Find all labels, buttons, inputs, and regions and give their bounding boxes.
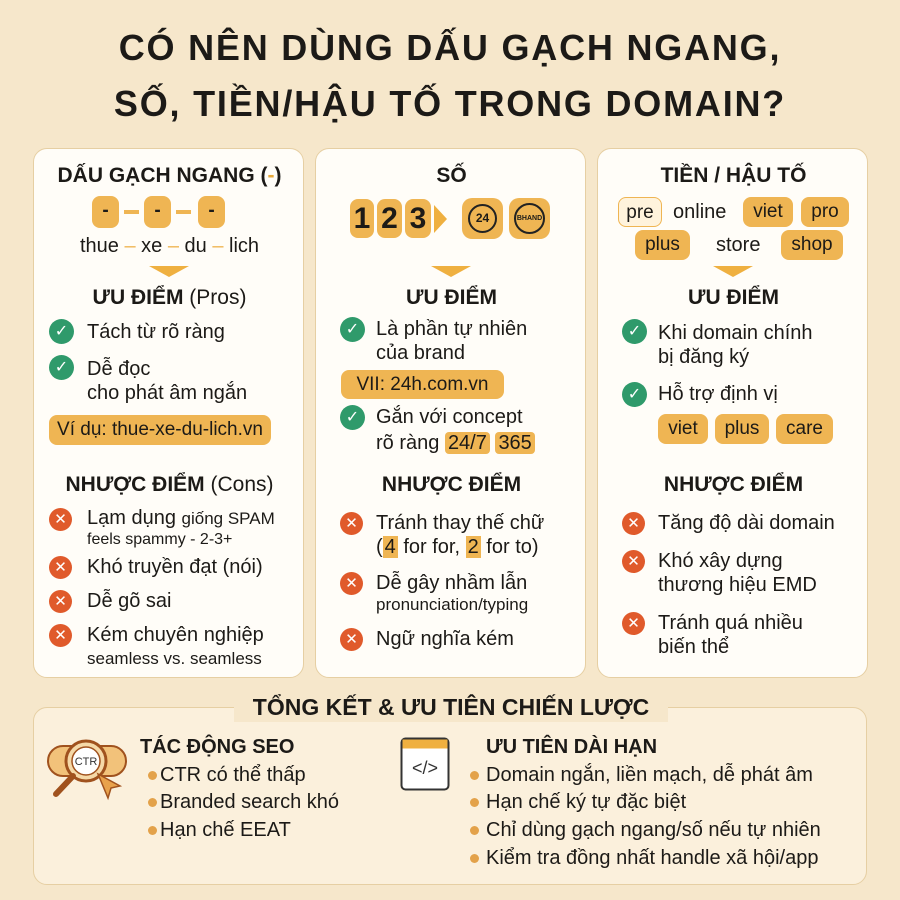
con 2: ✕	[627, 553, 640, 570]
pro 2: cho phát âm ngắn	[87, 382, 247, 404]
pro 1: bị đăng ký	[658, 346, 749, 368]
icon: 24h: 24	[476, 211, 489, 225]
SEO impact	[140, 734, 339, 841]
pro 1: ✓	[628, 323, 641, 340]
icon: CTR magnifier	[47, 740, 127, 800]
pro 2: Hỗ trợ định vị	[658, 383, 778, 405]
icon: CTR magnifier: CTR	[75, 756, 97, 768]
pro 1: của brand	[376, 342, 465, 364]
con 3	[49, 589, 172, 613]
SEO impact: Hạn chế EEAT	[160, 819, 291, 841]
pro 1	[49, 319, 225, 344]
affix tags: online	[673, 201, 726, 223]
con 2: Khó truyền đạt (nói)	[87, 556, 263, 578]
pros heading: ƯU ĐIỂM	[406, 286, 497, 309]
pro 1: Tách từ rõ ràng	[87, 321, 225, 343]
pro 1: Là phần tự nhiên	[376, 318, 527, 340]
summary heading: TỔNG KẾT & ƯU TIÊN CHIẾN LƯỢC	[253, 694, 649, 720]
cons heading: NHƯỢC ĐIỂM	[382, 473, 521, 496]
icon: globe: BHAND	[517, 215, 542, 222]
affix tags: shop	[791, 234, 833, 255]
long-term priorities	[470, 734, 821, 869]
icon: globe	[509, 198, 550, 239]
cons heading: NHƯỢC ĐIỂM (Cons)	[65, 473, 274, 496]
pro 1: ✓	[55, 323, 68, 340]
con 4: ✕	[54, 627, 67, 644]
long-term priorities: Chỉ dùng gạch ngang/số nếu tự nhiên	[486, 819, 821, 841]
pro 1: ✓	[346, 321, 359, 338]
con 1: Tăng độ dài domain	[658, 512, 835, 534]
pro 2: ✓	[346, 409, 359, 426]
affix tags: pre	[626, 202, 654, 223]
pro 2: plus	[725, 418, 759, 439]
number tiles: 1	[354, 202, 370, 235]
con 2: ✕	[345, 575, 358, 592]
con 1: Lạm dụng giống SPAM	[87, 507, 275, 529]
con 4: Kém chuyên nghiệp	[87, 624, 264, 646]
con 1	[340, 512, 544, 558]
hyphen pills: -	[102, 200, 109, 221]
pro 1: Khi domain chính	[658, 322, 813, 344]
con 1: ✕	[627, 515, 640, 532]
affix tags	[618, 197, 849, 260]
icon: code window	[400, 738, 450, 790]
pro 2: ✓	[55, 359, 68, 376]
SEO impact: CTR có thể thấp	[160, 764, 306, 786]
long-term priorities: ƯU TIÊN DÀI HẠN	[486, 736, 657, 758]
affix tags: viet	[753, 201, 783, 222]
hyphen pills: -	[208, 200, 215, 221]
example pill	[341, 370, 504, 399]
con 2: ✕	[54, 559, 67, 576]
con 4: seamless vs. seamless	[87, 649, 262, 668]
long-term priorities: Hạn chế ký tự đặc biệt	[486, 791, 686, 813]
pro 2: Dễ đọc	[87, 358, 150, 380]
long-term priorities: Kiểm tra đồng nhất handle xã hội/app	[486, 847, 818, 869]
con 3: biến thể	[658, 636, 729, 658]
heading: prefix/suffix: TIỀN / HẬU TỐ	[661, 164, 806, 187]
con 2: thương hiệu EMD	[658, 574, 817, 596]
con 2: Dễ gây nhầm lẫn	[376, 572, 527, 594]
affix tags: plus	[645, 234, 680, 255]
con 1	[49, 507, 275, 548]
pro 1	[622, 319, 813, 368]
con 2: Khó xây dựng	[658, 550, 783, 572]
con 4	[49, 624, 264, 668]
affix tags: pro	[811, 201, 839, 222]
affix tags: store	[716, 234, 760, 256]
con 1: ✕	[54, 511, 67, 528]
con 1: (4 for for, 2 for to)	[376, 536, 539, 558]
heading: numbers: SỐ	[436, 164, 467, 187]
example words: thue – xe – du – lich	[80, 235, 259, 257]
pro 2: rõ ràng 24/7 365	[376, 432, 532, 454]
con 3: ✕	[54, 593, 67, 610]
number tiles: 3	[410, 202, 426, 235]
arrow	[713, 266, 753, 277]
title: SỐ, TIỀN/HẬU TỐ TRONG DOMAIN?	[114, 83, 786, 124]
pro 1	[340, 317, 527, 364]
icon: 24h	[462, 198, 503, 239]
panel: summary	[33, 707, 867, 885]
panel: prefix/suffix	[597, 148, 868, 678]
con 1: feels spammy - 2-3+	[87, 531, 232, 548]
icon: code window: </>	[412, 758, 438, 778]
pro 2: ✓	[628, 386, 641, 403]
long-term priorities: Domain ngắn, liền mạch, dễ phát âm	[486, 764, 813, 786]
pro 2: Gắn với concept	[376, 406, 523, 428]
con 1: Tránh thay thế chữ	[376, 512, 544, 534]
con 2	[622, 550, 817, 596]
con 3: Ngữ nghĩa kém	[376, 628, 514, 650]
con 2: pronunciation/typing	[376, 595, 528, 614]
arrow	[431, 266, 471, 277]
panel: hyphen	[33, 148, 304, 678]
con 3: ✕	[627, 615, 640, 632]
title: CÓ NÊN DÙNG DẤU GẠCH NGANG,	[119, 27, 781, 68]
con 1: ✕	[345, 515, 358, 532]
con 3	[622, 612, 803, 658]
example pill: VII: 24h.com.vn	[356, 374, 488, 395]
pros heading: ƯU ĐIỂM (Pros)	[93, 286, 246, 309]
pro 2	[622, 382, 833, 444]
heading: hyphen: DẤU GẠCH NGANG (-)	[58, 164, 282, 187]
pro 2: care	[786, 418, 823, 439]
pro 2	[49, 355, 247, 404]
number tiles: 2	[381, 202, 398, 235]
title	[114, 27, 786, 124]
pro 2	[340, 405, 535, 454]
pros heading: ƯU ĐIỂM	[688, 286, 779, 309]
arrow	[149, 266, 189, 277]
example pill	[49, 415, 271, 445]
con 2	[340, 571, 528, 614]
pro 2: viet	[668, 418, 698, 439]
SEO impact: TÁC ĐỘNG SEO	[140, 736, 294, 758]
cons heading: NHƯỢC ĐIỂM	[664, 473, 803, 496]
example pill: Ví dụ: thue-xe-du-lich.vn	[57, 419, 263, 440]
SEO impact: Branded search khó	[160, 791, 339, 813]
con 3: ✕	[345, 631, 358, 648]
hyphen pills	[92, 196, 225, 228]
con 3: Tránh quá nhiều	[658, 612, 803, 634]
con 3: Dễ gõ sai	[87, 590, 172, 612]
hyphen pills: -	[154, 200, 161, 221]
number tiles	[350, 198, 550, 239]
panel: numbers	[315, 148, 586, 678]
